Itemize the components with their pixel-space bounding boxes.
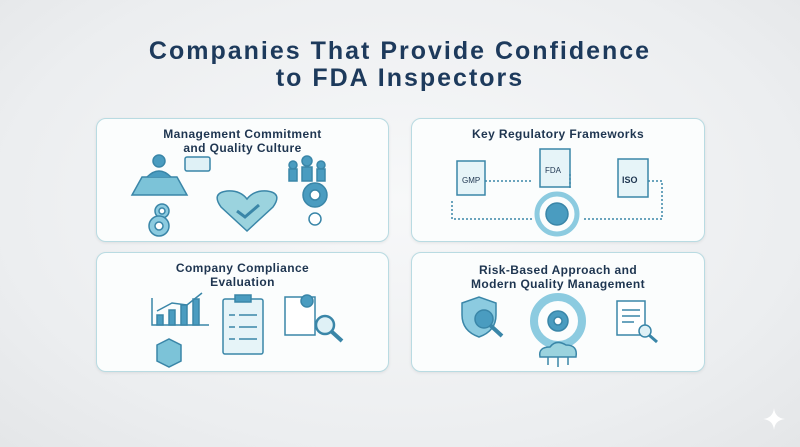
illustration: [151, 292, 344, 368]
illustration: [451, 148, 663, 236]
illustration: ISO: [622, 175, 638, 185]
heading: Company Compliance: [176, 261, 309, 275]
heading: [471, 263, 645, 291]
title: Companies That Provide Confidence: [149, 37, 651, 65]
title: [149, 37, 651, 92]
panel: key regulatory frameworks: [411, 118, 705, 242]
panel: company compliance evaluation: [96, 252, 389, 372]
heading: and Quality Culture: [183, 141, 302, 155]
heading: Risk-Based Approach and: [479, 263, 637, 277]
illustration: FDA: [545, 166, 562, 175]
heading: Evaluation: [210, 275, 275, 289]
icon: sparkle: [764, 409, 784, 429]
illustration: GMP: [462, 176, 480, 185]
panel: risk-based approach: [411, 252, 705, 372]
illustration: [461, 293, 658, 367]
heading: [176, 261, 309, 289]
heading: Management Commitment: [163, 127, 322, 141]
heading: Key Regulatory Frameworks: [472, 127, 644, 141]
title: to FDA Inspectors: [276, 64, 524, 92]
illustration: [130, 154, 328, 237]
panel: management commitment: [96, 118, 389, 242]
heading: Modern Quality Management: [471, 277, 645, 291]
heading: [163, 127, 322, 155]
